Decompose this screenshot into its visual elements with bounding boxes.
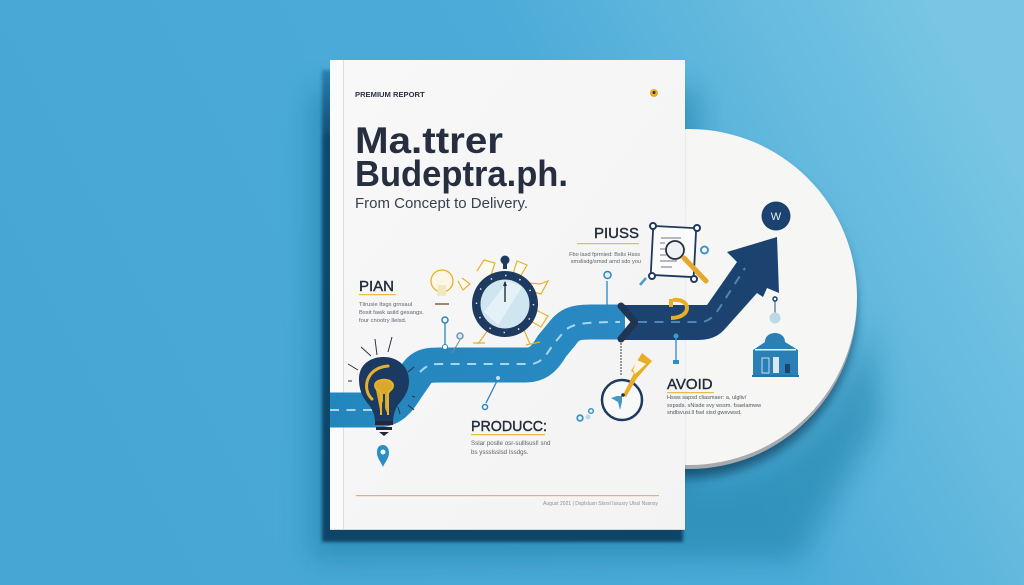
subtitle: From Concept to Delivery.: [355, 195, 528, 212]
badge: W logo: W: [771, 211, 782, 223]
section: Avoid: sxpsds. sNisde svy wssm. fsaelamww: [667, 403, 762, 409]
section: Avoid: Hsws sapsd cliasmaer: a, ulgliv/: [667, 395, 747, 401]
road: dark navy path and arrow: [620, 237, 779, 340]
kicker label: PREMIUM REPORT: [355, 90, 425, 99]
section: Avoid: [667, 376, 762, 416]
section: Plan: four cnootry Ilelsd.: [359, 318, 407, 324]
accent dot: [650, 89, 658, 97]
section: Plan: PIAN: [359, 278, 394, 295]
connector pins near plan: [442, 317, 463, 353]
section: Pluss: Fbo lasd fprrnied: Bslis Hsss: [569, 252, 640, 258]
disc: white circular backdrop: [521, 129, 857, 478]
report cover page: [330, 60, 685, 530]
section: Produce: Sslar poslle osr-sulllsusl! snd: [471, 440, 551, 447]
icon: stopwatch with gears: [458, 256, 548, 345]
chevron joint: [621, 306, 635, 339]
icon: light bulb: [348, 337, 415, 436]
section: Produce: bs yssslsslsd Issdgs.: [471, 449, 529, 456]
connector pin to Produce: [482, 376, 500, 410]
small blue dots: [577, 409, 593, 421]
title: Ma.ttrer: [355, 120, 503, 161]
footer rule: [356, 495, 659, 496]
title: [355, 120, 568, 194]
connector pin above road: [604, 272, 611, 308]
badge: W logo: [762, 202, 790, 230]
book shadow: [322, 70, 683, 542]
section: Avoid: sndlsvusi.ll fsel sisd gwsvwsd.: [667, 410, 742, 416]
footer text: August 2021 | Dsplslusn Stsrsl Issusry Ulssl Nssnsy: [543, 501, 658, 507]
road: blue path: [330, 322, 625, 410]
connector pin below road: [673, 334, 679, 364]
icon: map pin: [377, 445, 389, 467]
section: Plan: Bssit fawk asild gesangs.: [359, 310, 424, 316]
road centre dashes: [330, 322, 620, 410]
title: Budeptra.ph.: [355, 153, 568, 194]
section: Plan: Tlirusie Itsgs grnsaul: [359, 302, 412, 308]
section: Plan: [359, 278, 424, 324]
icon: yellow hook: [671, 299, 687, 318]
icon: domed building: [752, 296, 799, 377]
icon: small outline lightbulb: [431, 270, 453, 304]
section: Pluss: smslisdg/smsd amd sdo you: [571, 259, 641, 265]
icon: document with magnifier: [640, 223, 708, 285]
icon: compass with yellow pointer: [602, 340, 652, 420]
section: Produce: [471, 418, 551, 456]
ambient teal shadow: [310, 90, 880, 560]
section: Avoid: AVOID: [667, 376, 713, 393]
section: Pluss: [569, 225, 641, 265]
section: Pluss: PIUSS: [594, 225, 639, 242]
section: Produce: PRODUCC:: [471, 418, 547, 435]
